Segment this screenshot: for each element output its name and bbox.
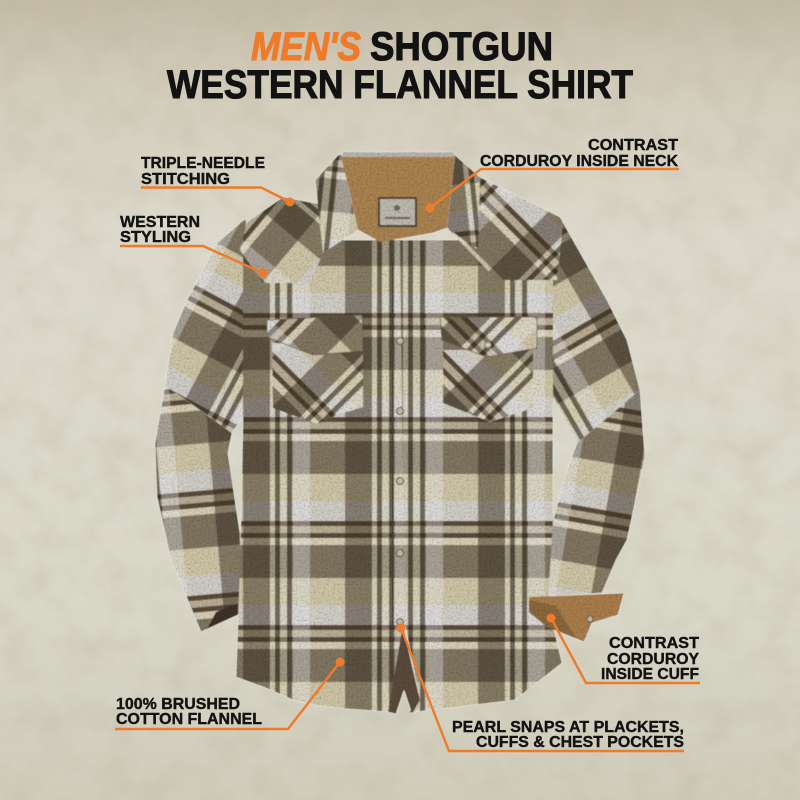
callout: western styling: [120, 214, 268, 278]
callout: triple-needle stitching: [141, 155, 294, 206]
callout: pearl snaps: PEARL SNAPS AT PLACKETS,: [452, 719, 684, 736]
neck label tag: [379, 198, 416, 226]
right front panel: [400, 240, 562, 713]
title: MEN'S: [251, 25, 361, 69]
callout: brushed cotton flannel: COTTON FLANNEL: [116, 711, 262, 728]
title: SHOTGUN: [370, 25, 553, 69]
callout: contrast corduroy inside neck: CONTRAST: [588, 137, 678, 154]
callout: triple-needle stitching: STITCHING: [141, 171, 230, 188]
left collar: [315, 153, 358, 253]
callout: contrast corduroy inside neck: CORDUROY INSIDE NECK: [480, 153, 678, 170]
callout: brushed cotton flannel: 100% BRUSHED: [116, 696, 240, 713]
right yoke: [447, 177, 563, 280]
callout: contrast corduroy inside cuff: INSIDE CUFF: [601, 666, 699, 683]
hem slit: [388, 625, 420, 714]
corduroy inside cuff: [529, 593, 624, 642]
flannel shirt illustration: [155, 152, 645, 714]
callout: brushed cotton flannel: [115, 658, 344, 729]
callout: contrast corduroy inside cuff: CONTRAST: [609, 635, 699, 652]
left front panel: [236, 240, 405, 712]
callout: pearl snaps: CUFFS & CHEST POCKETS: [476, 734, 684, 751]
title: WESTERN FLANNEL SHIRT: [167, 63, 633, 107]
callout: contrast corduroy inside cuff: CORDUROY: [607, 651, 699, 668]
left sleeve: [155, 217, 247, 632]
callout: contrast corduroy inside neck: [426, 137, 679, 212]
callout: western styling: STYLING: [120, 229, 191, 246]
left yoke: [240, 197, 325, 283]
right chest pocket: [440, 317, 537, 422]
collar strip: [342, 152, 454, 157]
callout: triple-needle stitching: TRIPLE-NEEDLE: [141, 155, 265, 172]
title: [167, 25, 633, 107]
right sleeve: [529, 217, 645, 597]
left chest pocket: [267, 315, 363, 424]
corduroy inside neck: [340, 155, 455, 242]
right collar: [447, 155, 480, 250]
callout: contrast corduroy inside cuff: [546, 614, 700, 683]
callout: western styling: WESTERN: [120, 214, 200, 231]
placket and snaps: [392, 262, 404, 626]
callout: pearl snaps: [396, 624, 684, 751]
